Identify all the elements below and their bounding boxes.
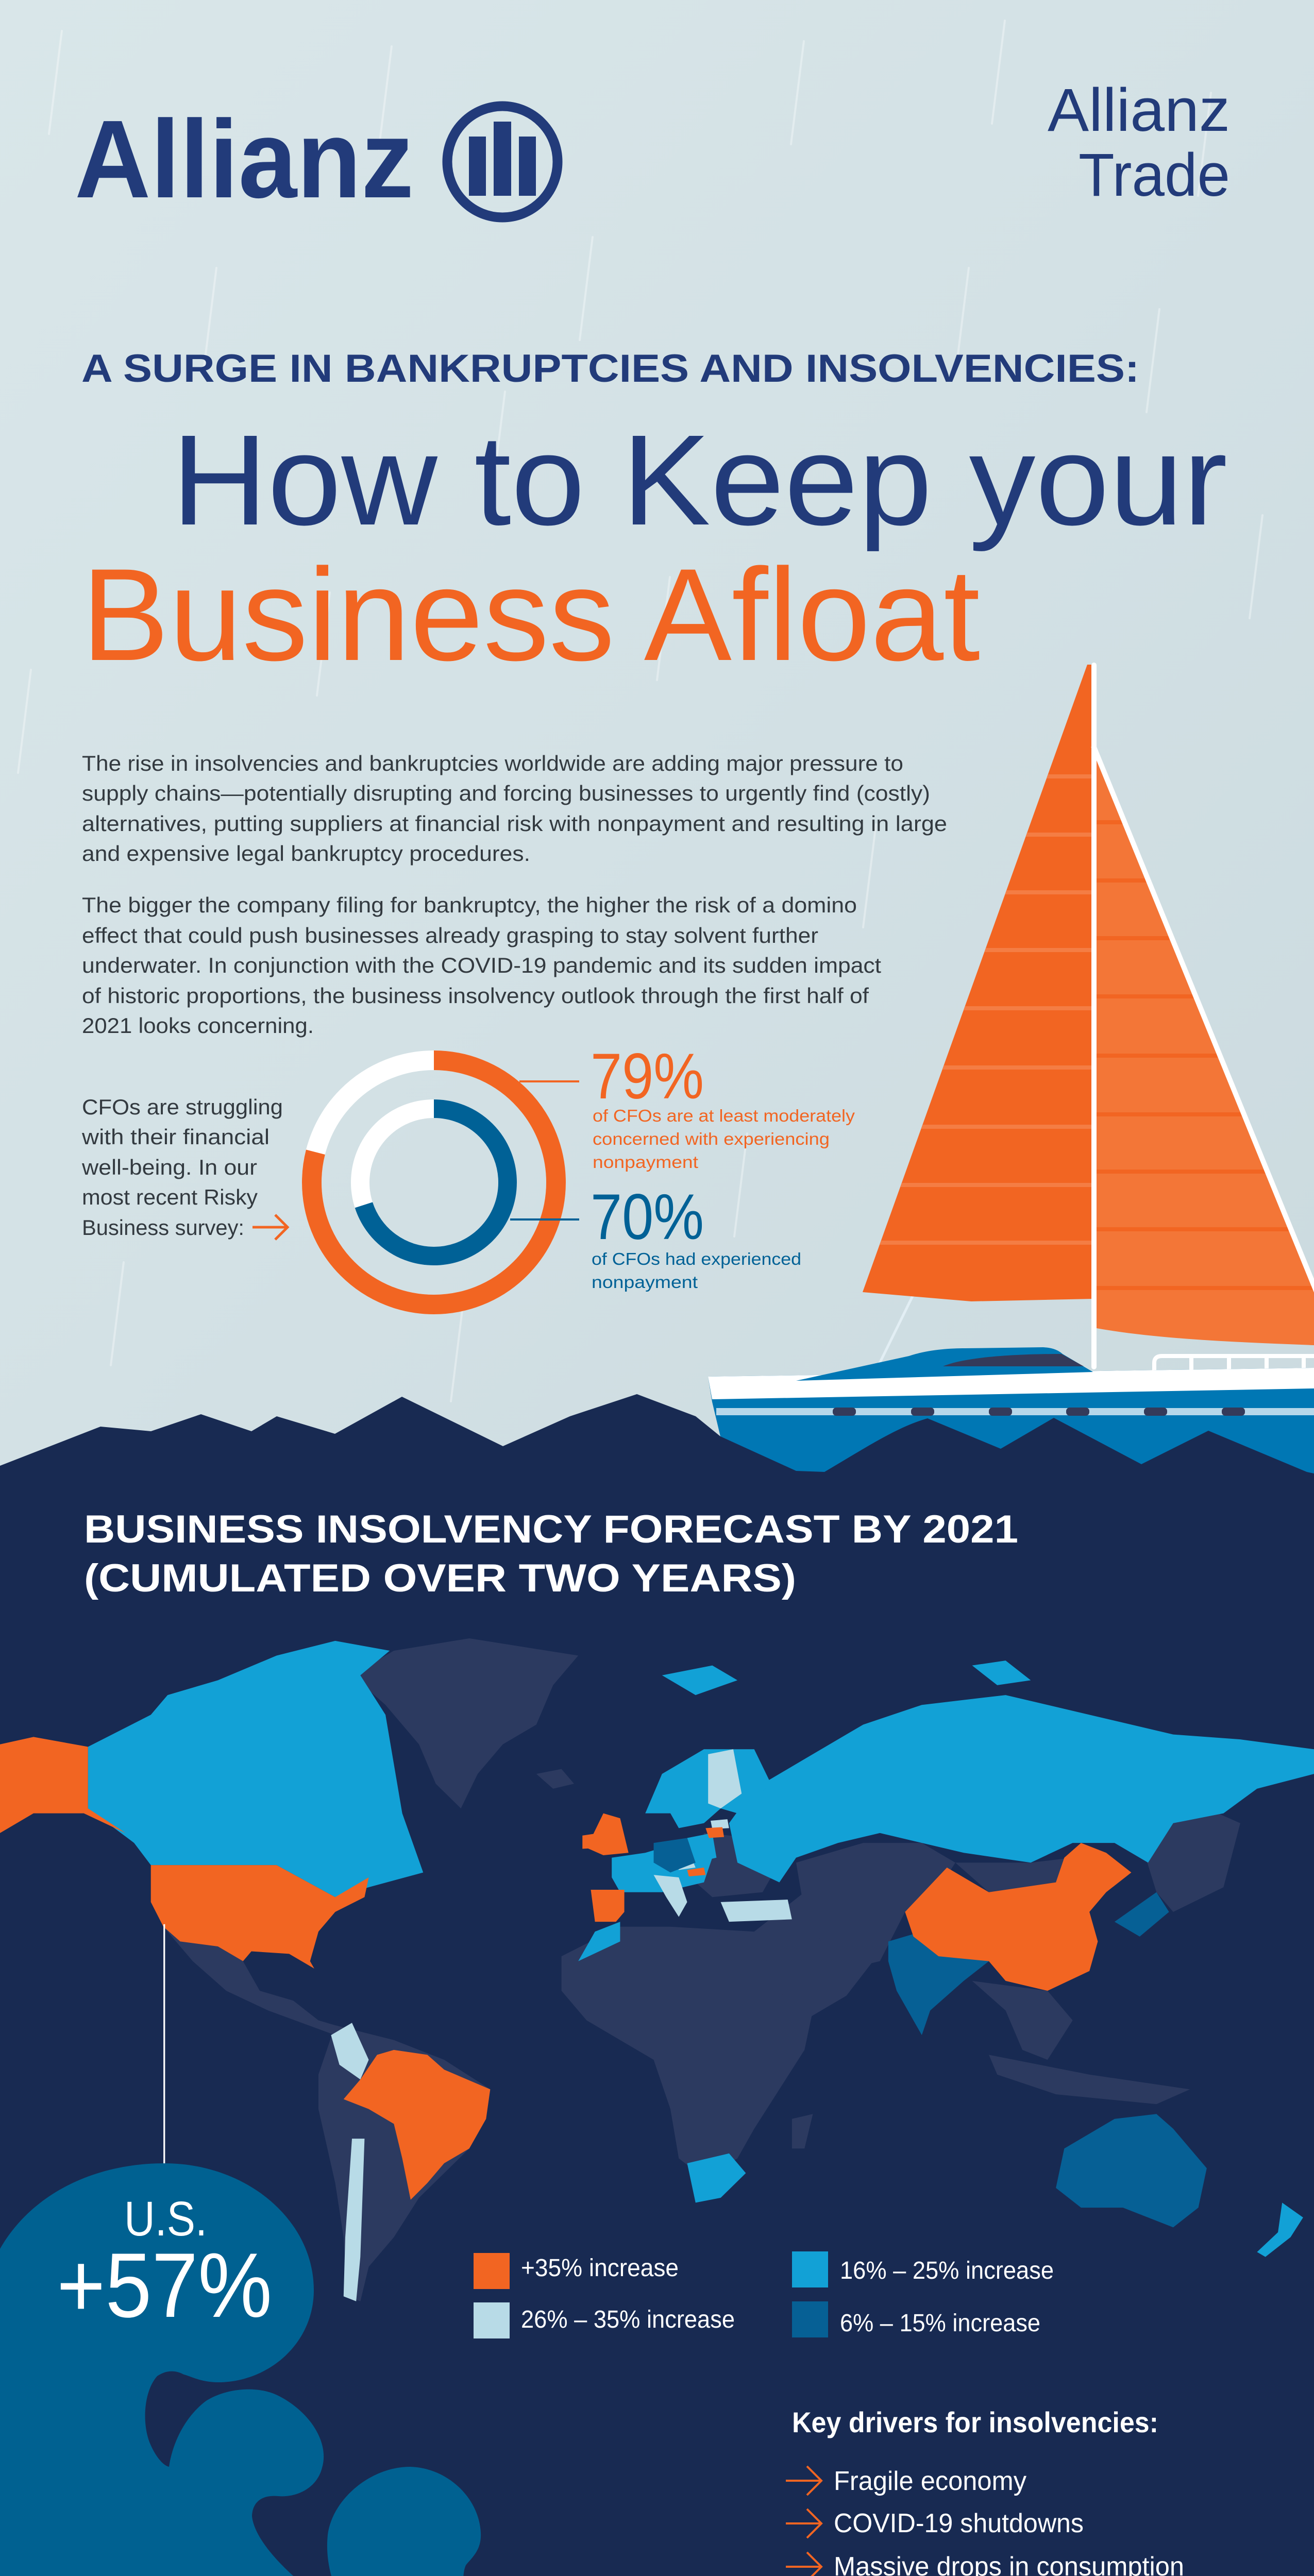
- rail: [1154, 1356, 1314, 1370]
- world map: [0, 1638, 1314, 2301]
- key drivers list: Key drivers for insolvencies:: [792, 2406, 1158, 2438]
- intro text: alternatives, putting suppliers at financial risk with nonpayment and resulting in large: [82, 811, 947, 836]
- legend: [474, 2251, 1054, 2338]
- intro text: The bigger the company filing for bankruptcy, the higher the risk of a domino: [82, 893, 857, 917]
- stat: 79%: concerned with experiencing: [593, 1129, 830, 1148]
- callout: U.S. +57%: +57%: [57, 2234, 272, 2336]
- sailboat: [708, 659, 1314, 1484]
- stat: 79%: 79%: [591, 1041, 704, 1112]
- stat: 79%: nonpayment: [593, 1153, 698, 1172]
- logo: Allianz Trade: [1048, 76, 1230, 209]
- intro text: of historic proportions, the business insolvency outlook through the first half of: [82, 984, 869, 1008]
- background: sky: [0, 0, 1314, 1494]
- map heading: BUSINESS INSOLVENCY FORECAST BY 2021: [84, 1507, 1018, 1551]
- waves: navy top edge: [0, 1394, 1314, 1504]
- intro text: [82, 751, 947, 1038]
- CFO text: [81, 1095, 283, 1240]
- title: How to Keep your: [172, 408, 1227, 552]
- callout: U.S. +57%: U.S.: [124, 2192, 207, 2246]
- CFO text: with their financial: [81, 1125, 269, 1149]
- icon: Allianz eagle circle: [447, 106, 558, 217]
- sail: right: [1092, 742, 1314, 1350]
- stat: 79%: [591, 1041, 855, 1172]
- logo: Allianz wordmark: Allianz: [75, 97, 414, 221]
- callout: U.S. +57%: [57, 2192, 272, 2336]
- legend: +35% increase: [521, 2255, 679, 2282]
- intro text: 2021 looks concerning.: [82, 1013, 314, 1038]
- legend: 26% – 35% increase: [521, 2306, 735, 2333]
- CFO text: Business survey:: [82, 1215, 244, 1240]
- stat: 70%: nonpayment: [592, 1273, 698, 1292]
- title: Business Afloat: [81, 541, 980, 688]
- stat: 70%: of CFOs had experienced: [592, 1249, 801, 1268]
- CFO text: well-being. In our: [81, 1155, 257, 1179]
- CFO text: CFOs are struggling: [82, 1095, 283, 1119]
- mast: [1091, 663, 1097, 1369]
- key drivers list: [786, 2406, 1197, 2576]
- stat: 79%: of CFOs are at least moderately: [593, 1106, 855, 1125]
- intro text: The rise in insolvencies and bankruptcies worldwide are adding major pressure to: [82, 751, 903, 775]
- key drivers list: COVID-19 shutdowns: [834, 2509, 1084, 2538]
- map heading: (CUMULATED OVER TWO YEARS): [84, 1556, 796, 1600]
- CFO text: most recent Risky: [82, 1185, 258, 1209]
- legend: 16% – 25% increase: [840, 2257, 1054, 2284]
- intro text: supply chains—potentially disrupting and forcing businesses to urgently find (costly): [82, 781, 930, 805]
- subtitle: A SURGE IN BANKRUPTCIES AND INSOLVENCIES:: [81, 347, 1139, 391]
- background: navy ocean: [0, 1468, 1314, 2576]
- key drivers list: Fragile economy: [834, 2466, 1026, 2496]
- hull: [708, 1368, 1314, 1484]
- stat: 70%: [591, 1181, 801, 1292]
- intro text: effect that could push businesses already grasping to stay solvent further: [82, 923, 818, 947]
- title: [81, 408, 1227, 688]
- stat: 70%: 70%: [591, 1181, 704, 1253]
- sail: left: [863, 665, 1091, 1301]
- legend: 6% – 15% increase: [840, 2310, 1040, 2337]
- wave: bottom blue with U.S. bubble: [0, 2163, 1314, 2576]
- logo: Allianz Trade: Trade: [1079, 141, 1230, 209]
- arrow: CFO: [252, 1215, 288, 1240]
- intro text: underwater. In conjunction with the COVID-19 pandemic and its sudden impact: [82, 953, 881, 977]
- intro text: and expensive legal bankruptcy procedures.: [82, 841, 530, 866]
- map heading: [84, 1507, 1018, 1600]
- donut chart: [312, 1060, 579, 1304]
- logo: Allianz Trade: Allianz: [1048, 76, 1230, 144]
